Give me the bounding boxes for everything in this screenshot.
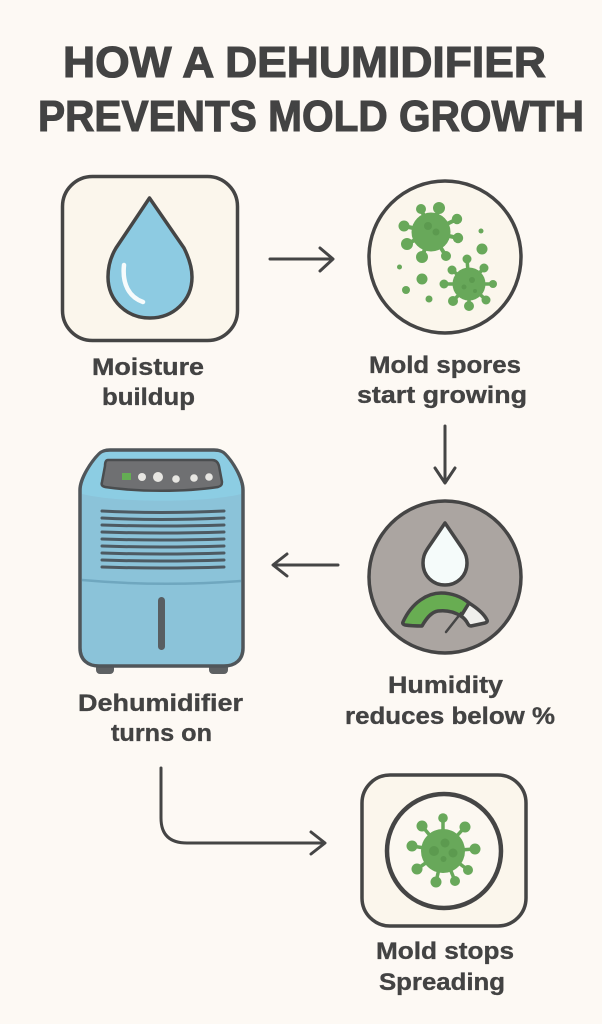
icon: white drop [423,523,467,585]
label: mold spores: start growing [357,382,527,409]
icon frame: rounded square [362,775,526,926]
label: mold stops spreading: Spreading [379,969,505,996]
arrow: mold to humidity [435,426,455,483]
icon: tank window slot [158,597,165,650]
label: moisture buildup: buildup [102,384,195,411]
icon: loose spore dots [397,228,488,302]
icon: small spore [440,254,497,311]
label: humidity reduces: reduces below % [345,703,555,730]
label: dehumidifier: Dehumidifier [78,690,244,717]
icon: dehumidifier feet [96,660,228,674]
label: humidity reduces [345,672,555,730]
icon: control panel [102,460,222,491]
arrow: moisture to mold [270,248,333,271]
arrow: dehumidifier to mold stops [161,768,325,854]
icon frame: rounded square [62,176,238,340]
icon frame: grey circle [369,501,521,653]
title [38,39,584,141]
label: mold spores: Mold spores [369,352,521,379]
title: HOW A DEHUMIDIFIER [63,39,546,87]
icon: water drop [108,198,192,318]
icon: large spore [398,202,463,263]
water tank seam [82,580,241,584]
label: dehumidifier: turns on [111,720,212,747]
label: mold spores [357,352,527,409]
panel: mold spores [357,181,527,409]
icon: contained spore [406,813,480,888]
icon: vent slats [102,511,224,568]
label: moisture buildup: Moisture [92,354,204,381]
label: mold stops spreading: Mold stops [376,938,514,965]
label: mold stops spreading [376,938,514,996]
icon: dehumidifier body [80,450,243,666]
arrow: humidity to dehumidifier [273,554,338,576]
panel: humidity reduces [345,501,555,730]
label: dehumidifier [78,690,244,747]
body top highlight [82,452,241,501]
icon frame: inner circle [387,794,501,908]
panel: moisture buildup [62,176,238,411]
panel: mold stops spreading [362,775,526,996]
label: humidity reduces: Humidity [388,672,503,699]
icon frame: circle [369,181,521,333]
icon: humidity gauge [403,593,487,632]
panel: dehumidifier [78,450,244,747]
label: moisture buildup [92,354,204,411]
